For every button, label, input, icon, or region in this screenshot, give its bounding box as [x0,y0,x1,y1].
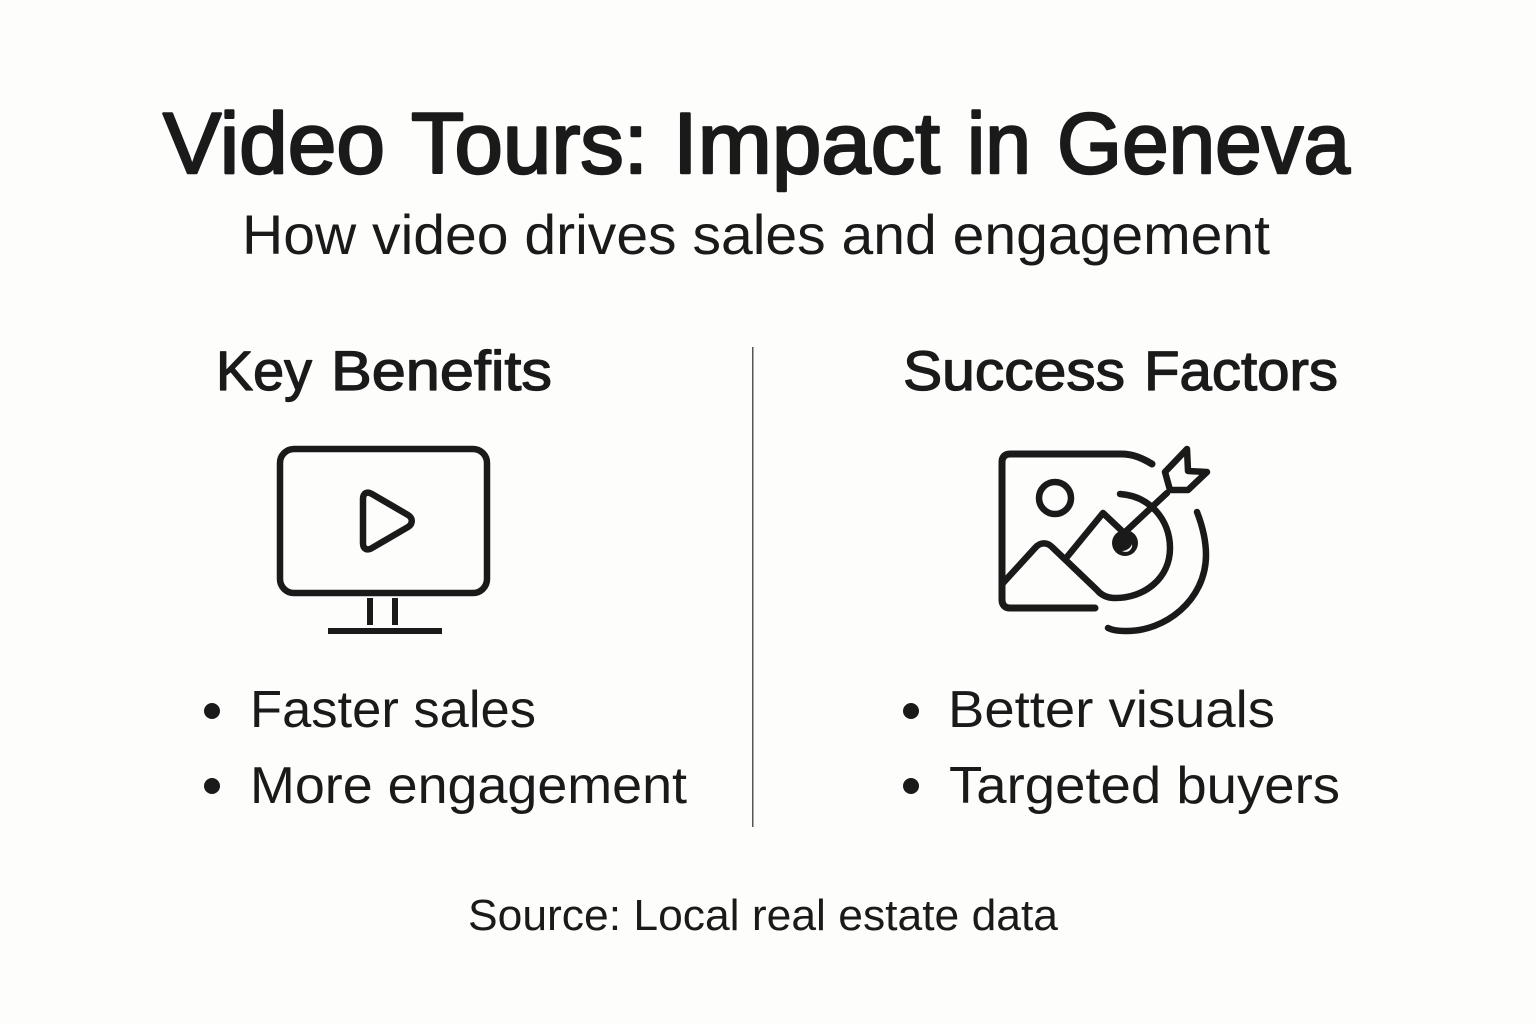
bullet list: success factors [903,681,1340,815]
heading: success factors: Factors [1144,339,1338,402]
heading: key benefits: Benefits [331,339,552,402]
heading: success factors: Success [903,339,1125,402]
title: Video [163,96,385,192]
bullet list: benefits: More engagement [250,757,688,815]
panel: success factors [903,339,1340,815]
title: in [967,96,1031,192]
title [163,96,1350,192]
title: Impact [673,96,940,192]
title: Geneva [1057,96,1350,192]
panel: key benefits [204,339,688,815]
heading: success factors [903,339,1338,402]
bullet list: success factors: Better visuals [948,681,1275,739]
subtitle: How video drives sales and engagement [242,203,1270,266]
icon: picture and target with arrow [1002,449,1207,631]
bullet list: success factors: Targeted buyers [949,757,1340,815]
icon: video monitor [280,449,487,634]
title: Tours: [411,96,648,192]
source note: Source: Local real estate data [468,891,1059,940]
bullet list: benefits [204,681,688,815]
heading: key benefits [216,339,552,402]
bullet list: benefits: Faster sales [250,681,536,739]
heading: key benefits: Key [216,339,312,402]
